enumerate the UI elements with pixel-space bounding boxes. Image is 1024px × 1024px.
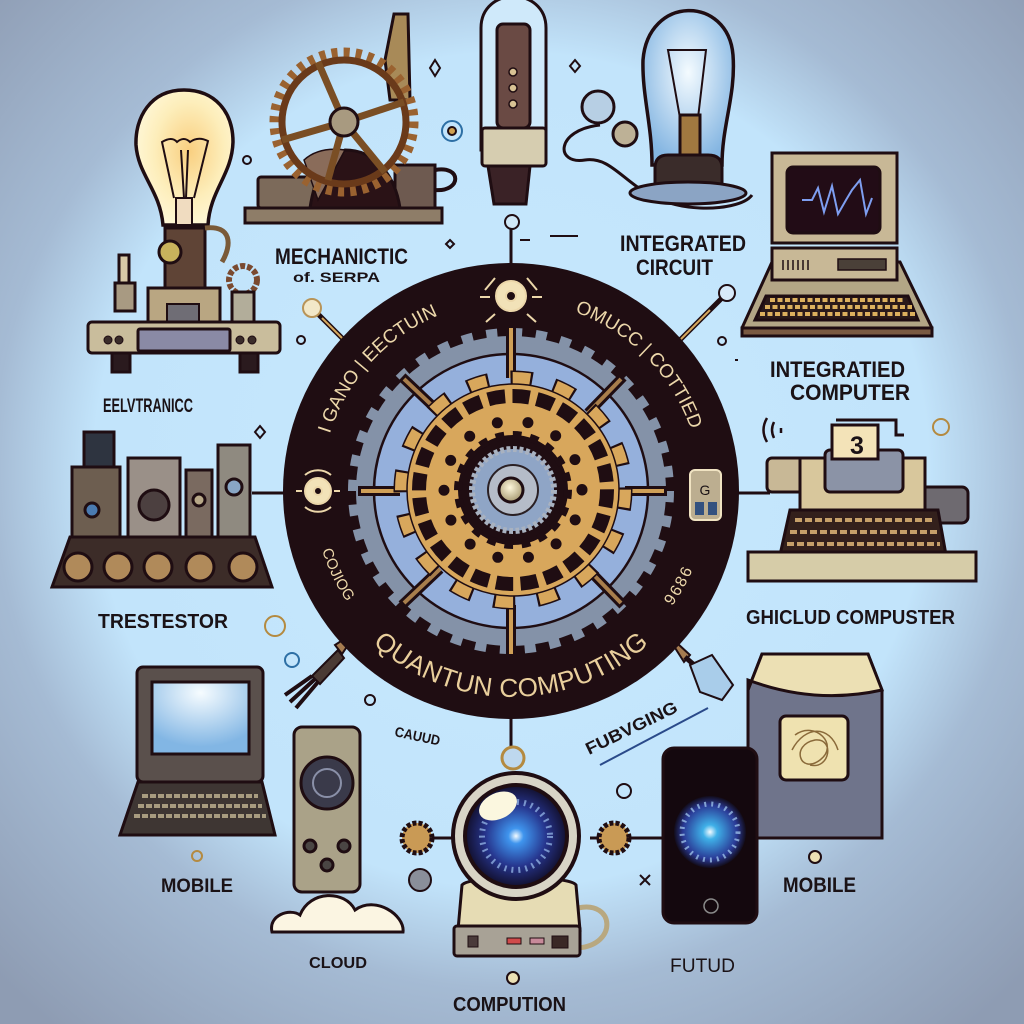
chip scribble (792, 730, 838, 766)
base panel (138, 329, 230, 351)
keyboard (134, 796, 266, 816)
bulb stem (176, 198, 192, 225)
roller (825, 450, 903, 492)
side gear (229, 266, 257, 294)
base knobs (64, 553, 257, 581)
blue-gray gear rim (362, 342, 660, 640)
rack 3 (186, 470, 212, 538)
lamp plate (630, 182, 746, 204)
label: computer: COMPUTER (790, 380, 910, 405)
golden gear teeth (403, 380, 623, 600)
gear ring (282, 60, 406, 184)
tube base (482, 128, 546, 166)
era 9: cloud device (272, 727, 403, 932)
ring text: top right: OMUCC | COTTIED (577, 302, 701, 427)
label: cloud handwritten: CAUUD (393, 723, 442, 748)
roller back (836, 420, 904, 435)
lamp glass (643, 11, 733, 165)
socket knob (159, 241, 181, 263)
label: ghiclud computer: GHICLUD COMPUSTER (746, 607, 956, 629)
orb dots (482, 802, 550, 870)
era 1: light bulb machine (88, 90, 280, 372)
gear back panel (304, 149, 345, 200)
body (800, 458, 925, 523)
orb shell (453, 773, 579, 899)
right ring device icon: G (700, 482, 710, 498)
pin: bottom left pen (285, 630, 358, 708)
pin: top left (303, 299, 358, 354)
rack dial 4 (226, 479, 242, 495)
lamp stem (680, 115, 700, 157)
orb cradle (458, 878, 580, 930)
era 4: lamp and cables (564, 11, 752, 208)
chip card (780, 716, 848, 780)
speaker (301, 757, 353, 809)
cable (435, 169, 455, 190)
wifi marks (764, 418, 781, 442)
dark outer ring (283, 263, 739, 719)
orb highlight (474, 786, 522, 826)
label: compution: COMPUTION (453, 994, 566, 1016)
labels (98, 231, 956, 1016)
rack 2 (128, 458, 180, 538)
side cylinder (232, 292, 254, 322)
era 6: typewriter computer (748, 420, 976, 581)
keyboard (755, 296, 918, 320)
label: fubving: FUBVGING (582, 698, 681, 759)
label: cloud: CLOUD (309, 955, 367, 972)
tube glass (481, 0, 546, 150)
spokes (358, 325, 667, 657)
label: circuit: CIRCUIT (636, 255, 713, 280)
gear spokes (282, 62, 404, 180)
lamp filament (668, 50, 706, 118)
cloud (272, 896, 403, 932)
hub (488, 465, 538, 515)
label: future: FUTUD (670, 956, 735, 977)
feet (112, 353, 258, 372)
base knobs (104, 336, 256, 344)
top ring icon (480, 278, 542, 322)
small disc (613, 122, 637, 146)
base (454, 926, 580, 956)
console vents (783, 260, 808, 270)
phone (663, 748, 757, 923)
monitor (772, 153, 897, 243)
laptop deck (120, 782, 275, 835)
console (772, 248, 897, 280)
connector gear left (402, 823, 432, 853)
phone dots (682, 804, 738, 860)
lamp cable (564, 125, 752, 208)
blue-gray gear teeth (356, 336, 666, 646)
silver gear teeth (472, 449, 554, 531)
bulb filament (162, 139, 208, 198)
ring text: top left: I GANO | EECTUIN (318, 304, 437, 432)
pin: top right (668, 285, 735, 352)
right ring device icon (690, 470, 721, 520)
handle (578, 907, 607, 948)
machine body (148, 288, 220, 322)
era 11: mobile device (663, 654, 882, 923)
pin: bottom right probe (665, 632, 733, 700)
bulb (136, 90, 233, 225)
spoke highlights (361, 328, 664, 654)
label: transistor: TRESTESTOR (98, 611, 229, 633)
bulb socket (165, 228, 205, 288)
label: electronic: EELVTRANICC (103, 396, 193, 417)
gear post (385, 14, 410, 100)
gear gear-back (310, 150, 400, 208)
label: integrated computer: INTEGRATIED (770, 357, 905, 382)
golden gear windows (419, 396, 607, 584)
body window (167, 304, 199, 322)
rack 1 (72, 467, 120, 539)
fubving underline (600, 708, 708, 765)
keys (760, 300, 915, 314)
waveform (802, 180, 872, 214)
tube window (509, 68, 517, 108)
laptop screen (152, 682, 249, 754)
rack dial 3 (193, 494, 205, 506)
golden gear disc (407, 384, 619, 596)
phone glow (674, 796, 746, 868)
label: mechanical: MECHANICTIC (275, 244, 408, 269)
paper (832, 425, 878, 459)
rack 4 (218, 445, 250, 537)
server top (748, 654, 882, 696)
orb (465, 785, 567, 887)
side device (115, 255, 135, 311)
central wheel (283, 263, 739, 719)
server box (748, 654, 882, 838)
base (748, 552, 976, 581)
lamp base (655, 155, 722, 192)
label: serda: of. SERPA (293, 269, 380, 285)
base lights (468, 936, 568, 948)
connector lines (252, 215, 770, 838)
era 2: mechanical gear (245, 14, 455, 223)
rack base (52, 537, 272, 587)
rack speaker (139, 490, 169, 520)
gear teeth (275, 53, 413, 191)
center knob (499, 478, 523, 502)
socket handle (205, 228, 228, 262)
label: integrated circuit: INTEGRATED (620, 231, 746, 256)
inner light disc (374, 354, 648, 628)
left box (767, 458, 807, 492)
device (294, 727, 360, 892)
small ball (409, 869, 431, 891)
ring text: left: COJIOG (323, 548, 354, 600)
speaker rings (313, 769, 341, 797)
base (245, 208, 442, 223)
era 3: vacuum tube (481, 0, 546, 204)
small ornaments (192, 60, 949, 984)
console drive (838, 259, 886, 270)
desk base (742, 262, 932, 336)
ring text: right: 9686 (664, 567, 692, 604)
era 10: quantum orb (453, 773, 607, 956)
key rows (787, 520, 940, 544)
side block (258, 177, 320, 208)
gear hub (330, 108, 358, 136)
laptop lid (137, 667, 263, 782)
rack dial (85, 503, 99, 517)
paper number: 3 (850, 432, 864, 460)
left ring icon (296, 470, 340, 512)
right box (920, 487, 968, 523)
rack screen (84, 432, 114, 467)
base (88, 322, 280, 353)
label: mobile right: MOBILE (783, 874, 856, 897)
right block (395, 165, 435, 208)
buttons (304, 840, 350, 871)
diagonal spoke highlights (404, 379, 621, 603)
era 8: laptop (120, 667, 275, 835)
era 7: electronic racks (52, 432, 272, 587)
monitor screen (787, 167, 880, 233)
connector gear right (599, 823, 629, 853)
ring text: quantum computing: QUANTUN COMPUTING (376, 634, 646, 698)
base lip (742, 328, 932, 336)
tube pins (488, 166, 530, 204)
black gear teeth (458, 435, 568, 545)
tube core (497, 24, 530, 128)
home button (704, 899, 718, 913)
era 5: retro computer (742, 153, 932, 336)
keyboard (780, 510, 946, 555)
golden gear dots (444, 421, 582, 559)
label: mobile left: MOBILE (161, 876, 233, 897)
disc (582, 91, 614, 123)
golden gear teeth outline (403, 380, 623, 600)
